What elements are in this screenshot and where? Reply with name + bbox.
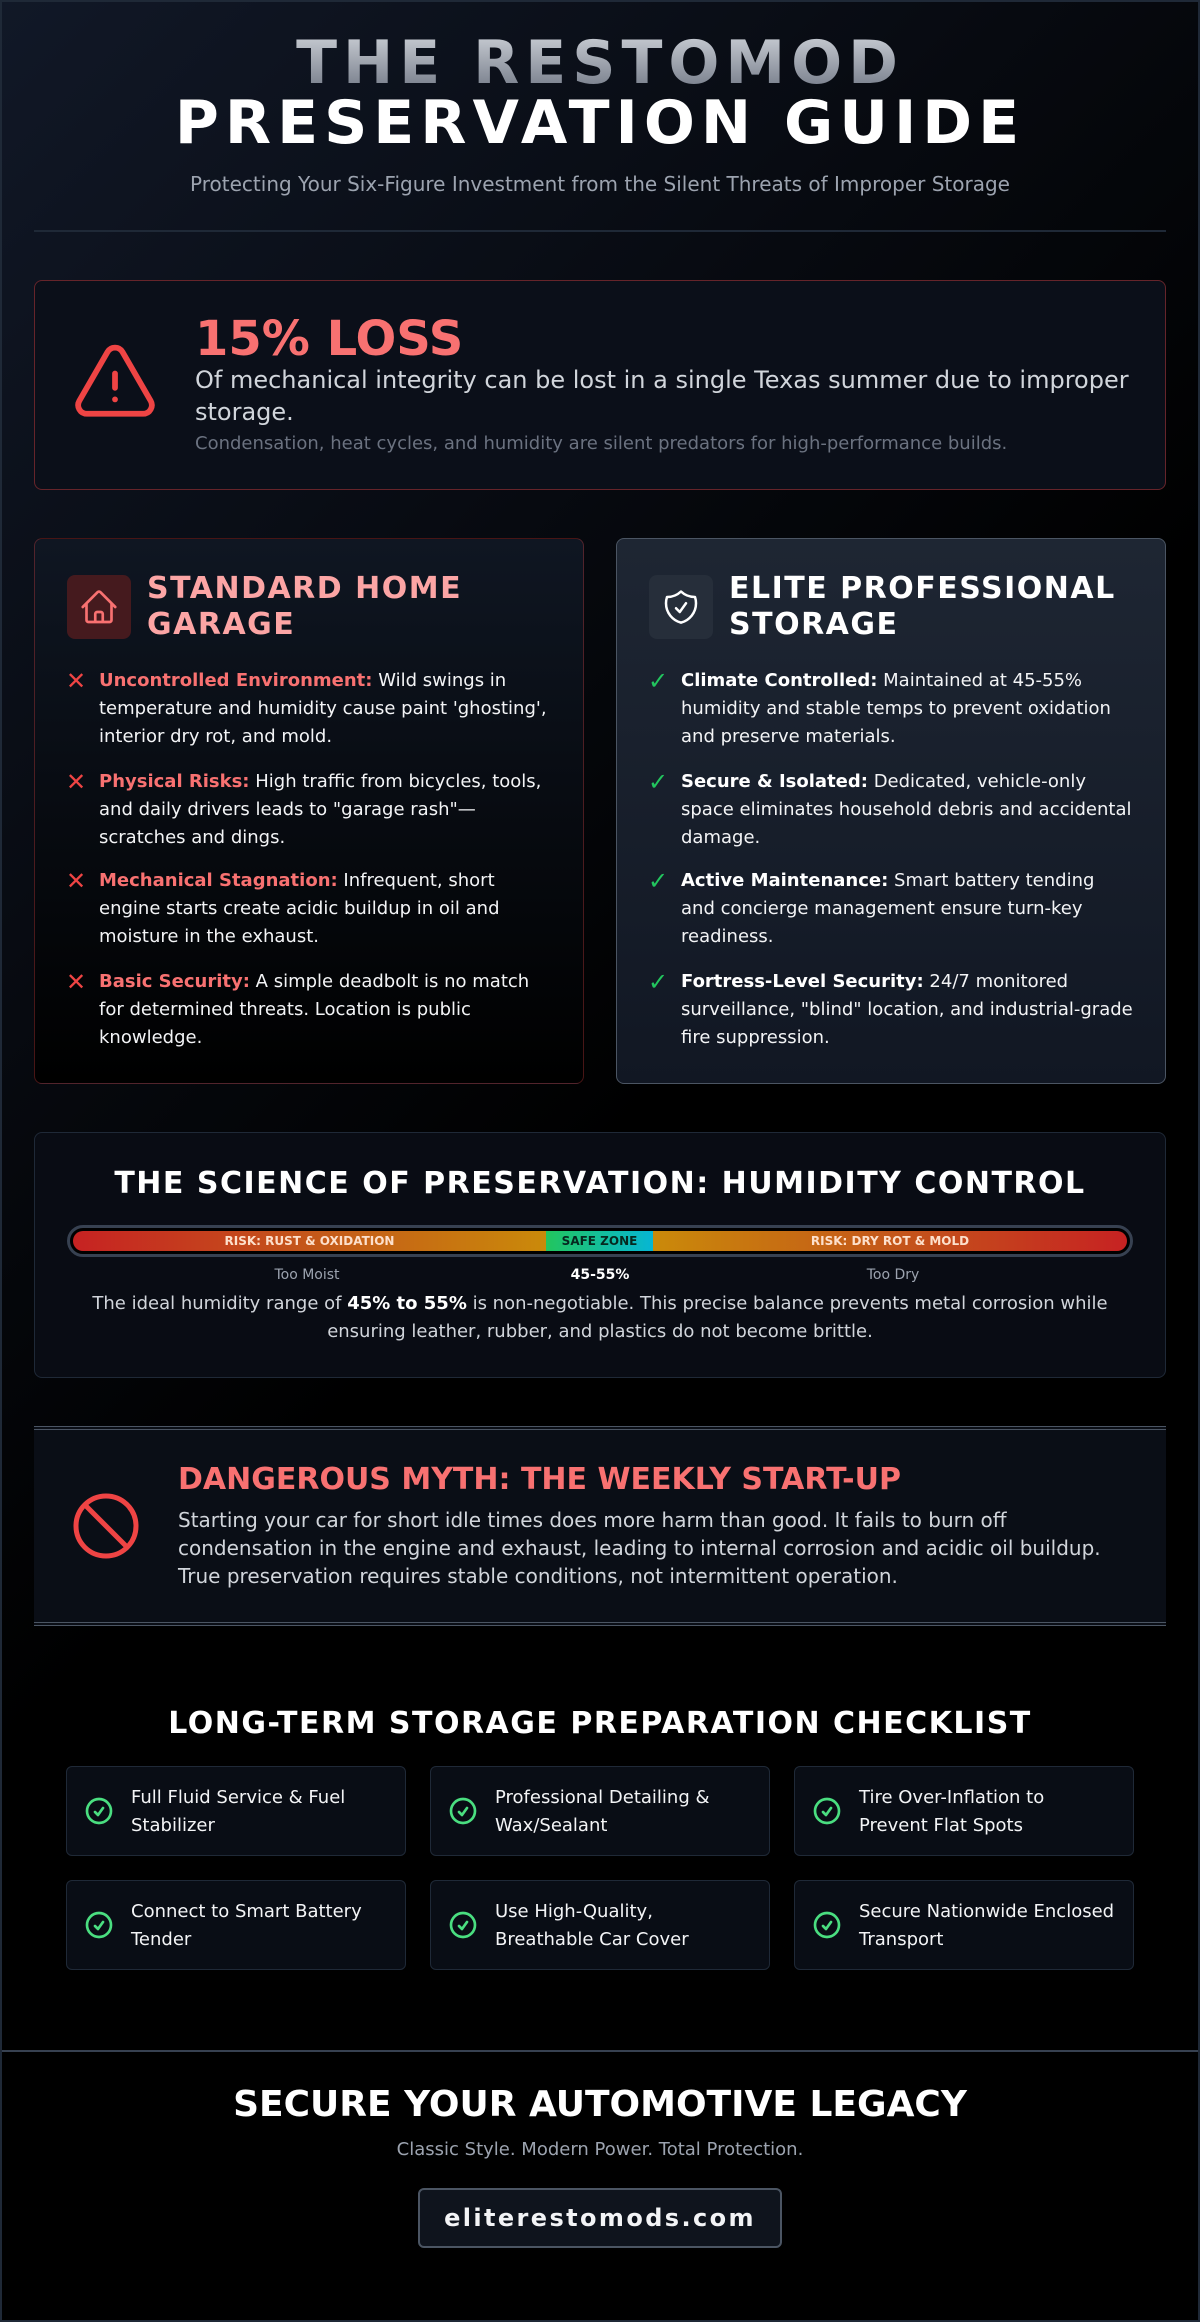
icon: prohibited	[74, 1494, 138, 1558]
title	[175, 28, 1025, 158]
risk: mechanical stagnation: moisture in the exhaust.	[99, 926, 319, 947]
risk: basic security: knowledge.	[99, 1027, 202, 1048]
benefit: secure and isolated	[648, 768, 1132, 848]
label: too moist: Too Moist	[274, 1267, 340, 1283]
panel: standard home garage	[34, 538, 584, 1084]
footer tagline: Classic Style. Modern Power. Total Protection.	[397, 2139, 803, 2160]
panel: dangerous myth	[34, 1426, 1166, 1626]
chart: humidity gauge bar: RISK: RUST & OXIDATION	[225, 1234, 394, 1248]
subtitle: Protecting Your Six-Figure Investment from the Silent Threats of Improper Storage	[190, 172, 1010, 196]
checklist tile: detailing	[430, 1766, 770, 1856]
website button: eliterestomods.com	[444, 2204, 756, 2232]
benefit: fortress-level security	[648, 968, 1133, 1048]
risk: physical risks	[66, 768, 541, 848]
risk: basic security	[66, 968, 529, 1048]
chart: humidity gauge bar: RISK: DRY ROT & MOLD	[811, 1234, 969, 1248]
benefit: climate controlled: and preserve materials.	[681, 726, 896, 747]
checklist tile: car cover	[430, 1880, 770, 1970]
footer heading: SECURE YOUR AUTOMOTIVE LEGACY	[233, 2084, 967, 2125]
panel: 15% loss alert	[34, 280, 1166, 490]
chart: humidity gauge bar	[67, 1225, 1133, 1257]
heading: humidity control: THE SCIENCE OF PRESERVATION: HUMIDITY CONTROL	[114, 1166, 1086, 1201]
panel: elite professional storage	[616, 538, 1166, 1084]
risk: basic security: for determined threats. Location is public	[99, 999, 471, 1020]
risk: physical risks: scratches and dings.	[99, 827, 285, 848]
stat heading: 15% LOSS	[195, 311, 463, 367]
checklist tile: fluid service	[66, 1766, 406, 1856]
text: ✕	[66, 968, 86, 996]
benefit: fortress-level security: Fortress-Level Security: 24/7 monitored	[681, 971, 1068, 992]
risk: mechanical stagnation	[66, 867, 500, 947]
checklist tile: battery tender	[66, 1880, 406, 1970]
humidity explanation: The ideal humidity range of 45% to 55% is non-negotiable. This precise balance prevents metal corrosion while ensuring leather, rubber, and plastics do not become brittle.	[92, 1293, 1108, 1342]
stat note: Condensation, heat cycles, and humidity are silent predators for high-performance builds.	[195, 433, 1007, 454]
panel: humidity control	[34, 1132, 1166, 1378]
heading: standard home garage: STANDARD HOME GARAGE	[147, 571, 462, 642]
text: ✕	[66, 867, 86, 895]
risk: physical risks: and daily drivers leads to "garage rash"—	[99, 799, 476, 820]
risk: mechanical stagnation: Mechanical Stagnation: Infrequent, short	[99, 870, 495, 891]
text: ✓	[648, 968, 668, 996]
benefit: climate controlled: Climate Controlled: Maintained at 45-55%	[681, 670, 1082, 691]
benefit: fortress-level security: surveillance, "blind" location, and industrial-grade	[681, 999, 1133, 1020]
icon: shield check	[649, 575, 713, 639]
benefit: secure and isolated: space eliminates household debris and accidental	[681, 799, 1132, 820]
checklist tile: battery tender: Connect to Smart Battery Tender	[131, 1901, 362, 1950]
label: too dry: Too Dry	[867, 1267, 919, 1283]
benefit: active maintenance: and concierge management ensure turn-key	[681, 898, 1083, 919]
risk: uncontrolled environment	[66, 667, 547, 747]
checklist tile: detailing: Professional Detailing & Wax/Sealant	[495, 1787, 710, 1836]
checklist tile: enclosed transport	[794, 1880, 1134, 1970]
checklist tile: car cover: Use High-Quality, Breathable Car Cover	[495, 1901, 689, 1950]
stat description: Of mechanical integrity can be lost in a single Texas summer due to improper storage.	[195, 366, 1129, 426]
benefit: climate controlled	[648, 667, 1111, 747]
benefit: active maintenance: readiness.	[681, 926, 774, 947]
risk: uncontrolled environment: interior dry rot, and mold.	[99, 726, 332, 747]
benefit: secure and isolated: Secure & Isolated: Dedicated, vehicle-only	[681, 771, 1086, 792]
checklist tile: enclosed transport: Secure Nationwide Enclosed Transport	[859, 1901, 1114, 1950]
risk: uncontrolled environment: temperature and humidity cause paint 'ghosting',	[99, 698, 547, 719]
risk: uncontrolled environment: Uncontrolled Environment: Wild swings in	[99, 670, 506, 691]
risk: physical risks: Physical Risks: High traffic from bicycles, tools,	[99, 771, 541, 792]
risk: basic security: Basic Security: A simple deadbolt is no match	[99, 971, 529, 992]
benefit: fortress-level security: fire suppression.	[681, 1027, 830, 1048]
heading: elite professional storage: ELITE PROFESSIONAL STORAGE	[729, 571, 1116, 642]
icon: house	[67, 575, 131, 639]
checklist tile: fluid service: Full Fluid Service & Fuel Stabilizer	[131, 1787, 345, 1836]
footer	[0, 2050, 1200, 2322]
text: ✓	[648, 867, 668, 895]
text: ✕	[66, 667, 86, 695]
text: ✓	[648, 667, 668, 695]
benefit: active maintenance	[648, 867, 1094, 947]
title: THE RESTOMOD	[296, 28, 904, 98]
text: ✓	[648, 768, 668, 796]
title: PRESERVATION GUIDE	[175, 88, 1025, 158]
text: ✕	[66, 768, 86, 796]
heading: dangerous myth: DANGEROUS MYTH: THE WEEKLY START-UP	[178, 1462, 901, 1497]
checklist tile: tire inflation	[794, 1766, 1134, 1856]
heading: checklist: LONG-TERM STORAGE PREPARATION CHECKLIST	[168, 1706, 1032, 1741]
website button	[418, 2188, 782, 2248]
myth explanation: Starting your car for short idle times does more harm than good. It fails to burn off condensation in the engine and exhaust, leading to internal corrosion and acidic oil buildup. True preservation requires stable conditions, not intermittent operation.	[178, 1508, 1101, 1588]
benefit: secure and isolated: damage.	[681, 827, 760, 848]
label: safe range: 45-55%	[571, 1267, 629, 1283]
benefit: climate controlled: humidity and stable temps to prevent oxidation	[681, 698, 1111, 719]
icon: warning triangle	[75, 344, 155, 417]
chart: humidity gauge bar: SAFE ZONE	[562, 1234, 637, 1248]
benefit: active maintenance: Active Maintenance: Smart battery tending	[681, 870, 1094, 891]
risk: mechanical stagnation: engine starts create acidic buildup in oil and	[99, 898, 500, 919]
checklist tile: tire inflation: Tire Over-Inflation to Prevent Flat Spots	[859, 1787, 1044, 1836]
